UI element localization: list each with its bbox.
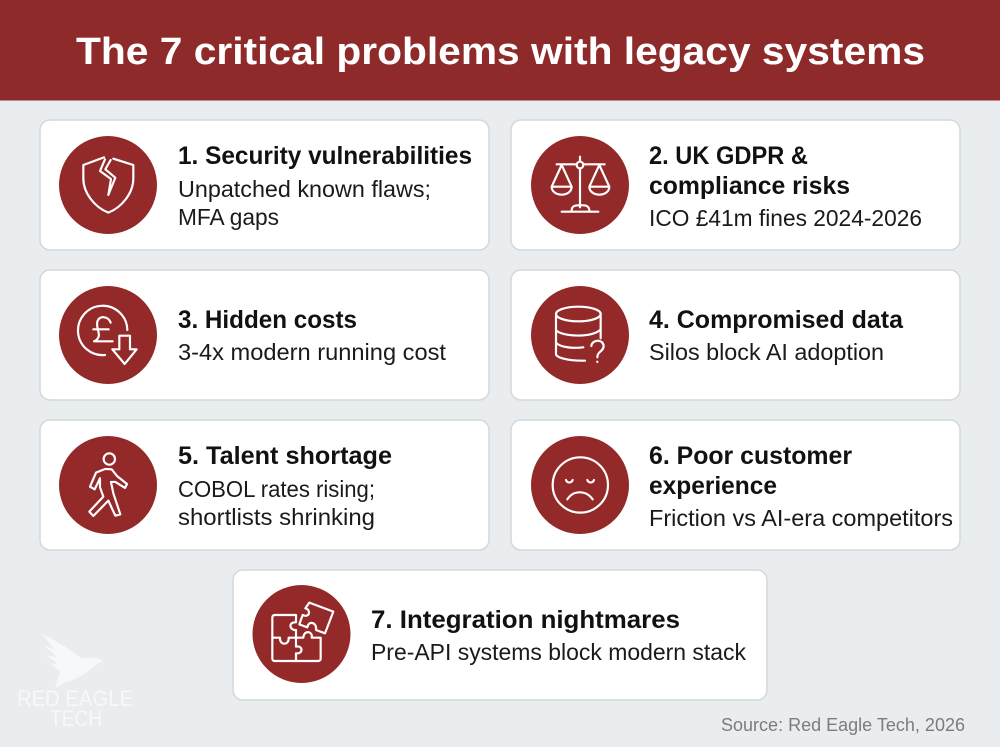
description: Unpatched known flaws; [178,176,431,202]
icon: puzzle pieces [252,585,350,683]
panel: 7 integration nightmares [233,570,767,700]
description [178,476,375,530]
source note: Source: Red Eagle Tech, 2026 [721,715,965,735]
panel: 3 hidden costs [40,270,489,400]
heading: compliance risks [649,172,850,200]
heading [649,442,852,500]
panel: 1 security vulnerabilities [40,120,489,250]
heading: 2. UK GDPR & [649,142,808,170]
heading: 5. Talent shortage [178,442,392,470]
heading: 1. Security vulnerabilities [178,142,472,170]
icon: cracked shield [59,136,157,234]
description: shortlists shrinking [178,504,375,530]
icon: sad face [531,436,629,534]
panel: 5 talent shortage [40,420,489,550]
heading: 7. Integration nightmares [371,606,680,634]
description: COBOL rates rising; [178,476,375,502]
icon: walking person [59,436,157,534]
panel: 6 poor customer experience [511,420,960,550]
description [178,176,431,230]
description: MFA gaps [178,204,279,230]
description: 3-4x modern running cost [178,339,447,365]
heading: 4. Compromised data [649,306,904,334]
icon: scales of justice [531,136,629,234]
heading [649,142,850,200]
description: Silos block AI adoption [649,339,884,365]
heading: 6. Poor customer [649,442,852,470]
panel: 2 UK GDPR and compliance risks [511,120,960,250]
icon: pound with down arrow [59,286,157,384]
description: Friction vs AI-era competitors [649,505,953,531]
heading: experience [649,472,777,500]
logo: Red Eagle Tech watermark: TECH [50,706,102,731]
logo: Red Eagle Tech watermark [17,633,133,731]
logo: Red Eagle Tech watermark: RED EAGLE [17,686,133,711]
title: The 7 critical problems with legacy systems [76,31,925,73]
title banner [0,0,1000,100]
panel: 4 compromised data [511,270,960,400]
description: ICO £41m fines 2024-2026 [649,205,922,231]
icon: database with question mark [531,286,629,384]
description: Pre-API systems block modern stack [371,639,746,665]
heading: 3. Hidden costs [178,306,357,334]
